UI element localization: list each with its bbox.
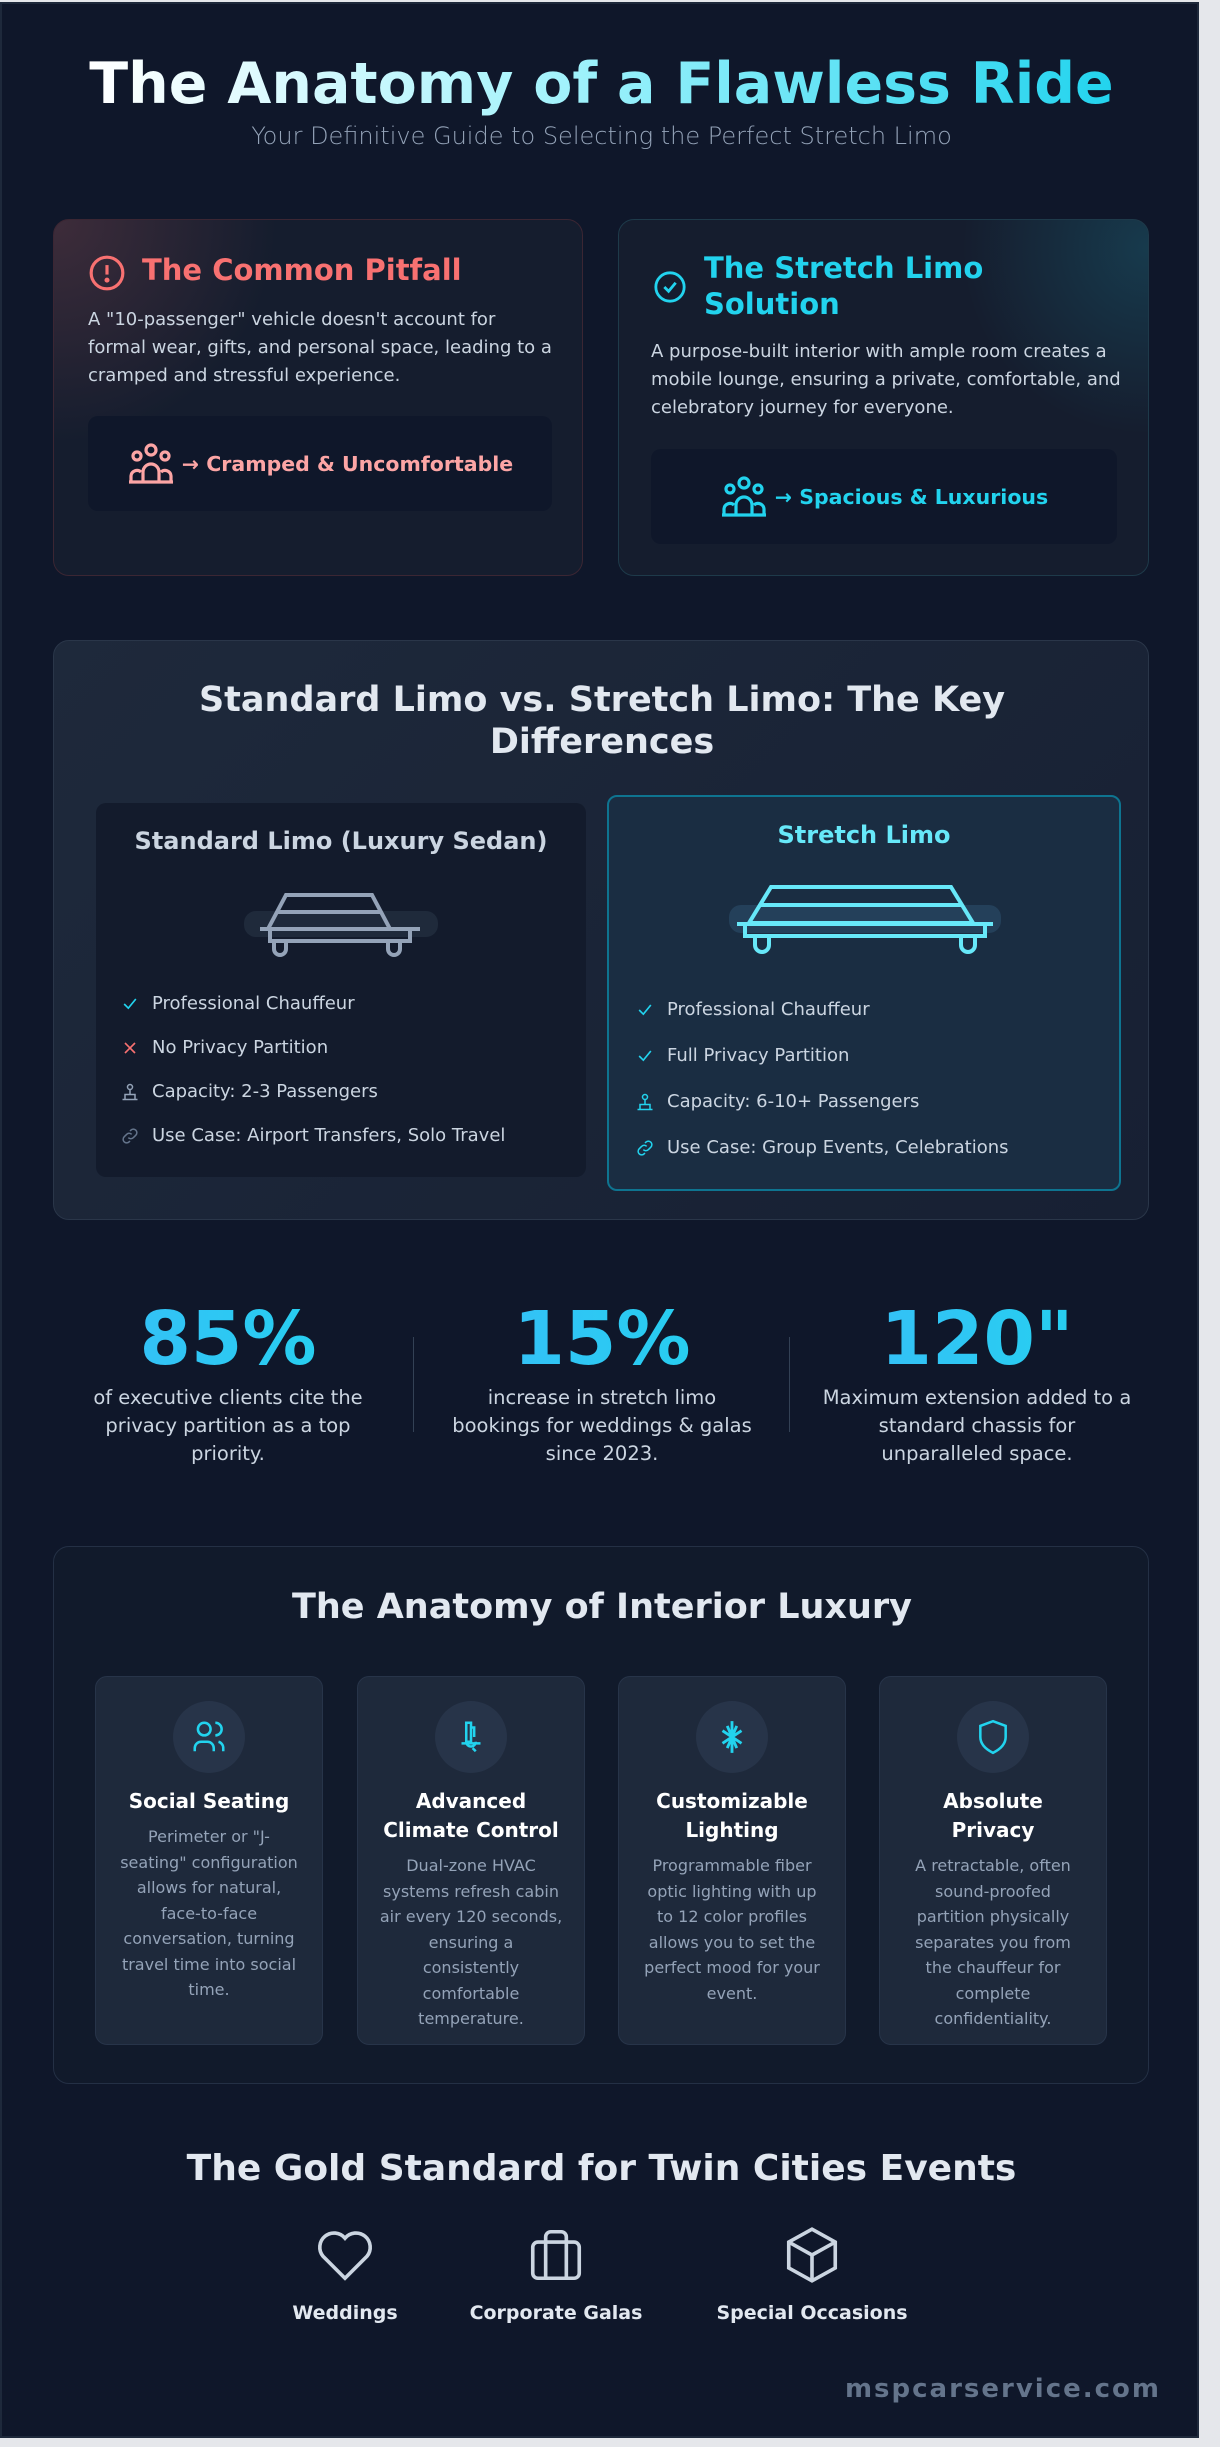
stat: 85%	[93, 1296, 363, 1465]
heading: stretch: Stretch Limo	[777, 821, 951, 849]
icon: corporate galas: Corporate Galas	[470, 2302, 642, 2324]
list: stretch features: Full Privacy Partition	[667, 1045, 849, 1066]
panel: comparison	[53, 640, 1149, 1220]
heading: pitfall: The Common Pitfall	[142, 253, 462, 287]
icon: warning	[90, 256, 124, 290]
card: social seating: Social Seating	[129, 1789, 289, 1813]
text: pitfall: A "10-passenger" vehicle doesn't account for formal wear, gifts, and personal space, leading to a cramped and stressful experience.	[88, 309, 552, 386]
card: privacy: Absolute	[943, 1789, 1043, 1813]
card: climate control: Dual-zone HVAC systems refresh cabin air every 120 seconds, ensuring a consistently comfortable temperature.	[380, 1856, 562, 2028]
icon: weddings: Weddings	[292, 2302, 398, 2324]
icon: special occasions	[716, 2227, 908, 2324]
list: standard features: Capacity: 2-3 Passengers	[152, 1081, 378, 1102]
panel: common pitfall	[53, 219, 583, 576]
list: standard features: Professional Chauffeur	[152, 993, 355, 1014]
heading: solution	[704, 251, 983, 321]
subtitle: Your Definitive Guide to Selecting the Perfect Stretch Limo	[251, 122, 952, 150]
list: standard features: No Privacy Partition	[152, 1037, 328, 1058]
list: standard features	[122, 993, 505, 1146]
list: standard features: Use Case: Airport Transfers, Solo Travel	[152, 1125, 505, 1146]
icon: weddings	[292, 2231, 398, 2324]
stat: 120	[823, 1296, 1131, 1465]
stat: 85%: 85%	[139, 1296, 317, 1382]
list: stretch features: Capacity: 6-10+ Passengers	[667, 1091, 919, 1112]
callout: cramped: → Cramped & Uncomfortable	[182, 452, 513, 476]
list: stretch features: Use Case: Group Events, Celebrations	[667, 1137, 1009, 1158]
panel: stretch limo solution	[618, 219, 1149, 576]
stat: 15%: 15%	[513, 1296, 691, 1382]
card: stretch limo	[607, 795, 1121, 1191]
card: lighting: Customizable	[656, 1789, 808, 1813]
card: climate control	[357, 1676, 585, 2045]
heading: gold standard: The Gold Standard for Twin Cities Events	[187, 2148, 1016, 2189]
callout: spacious	[651, 449, 1117, 544]
list: stretch features	[637, 999, 1009, 1158]
card: social seating: Perimeter or "J-seating" configuration allows for natural, face-to-face conversation, turning travel time into social time.	[120, 1827, 298, 1999]
heading: comparison	[199, 680, 1005, 762]
icon: sedan	[244, 893, 438, 957]
callout: cramped	[88, 416, 552, 511]
icon: check circle	[654, 271, 686, 303]
card: privacy: A retractable, often sound-proofed partition physically separates you from the chauffeur for complete confidentiality.	[915, 1856, 1071, 2028]
footer: website: mspcarservice.com	[845, 2374, 1161, 2404]
card: lighting: Lighting	[685, 1818, 779, 1842]
icon: special occasions: Special Occasions	[716, 2302, 908, 2324]
card: privacy: Privacy	[952, 1818, 1034, 1842]
text: solution: A purpose-built interior with ample room creates a mobile lounge, ensuring a private, comfortable, and celebratory journey for everyone.	[651, 341, 1121, 418]
stat: 15%	[452, 1296, 752, 1465]
card: climate control: Advanced	[416, 1789, 526, 1813]
stat: 85%: of executive clients cite the privacy partition as a top priority.	[93, 1386, 363, 1465]
stat: 15%: increase in stretch limo bookings for weddings & galas since 2023.	[452, 1386, 752, 1465]
heading: solution: The Stretch Limo	[704, 251, 983, 285]
icon: stretch limo	[729, 885, 1001, 954]
panel: interior luxury	[53, 1546, 1149, 2084]
list: stretch features: Professional Chauffeur	[667, 999, 870, 1020]
heading: comparison: Differences	[490, 722, 714, 762]
card: standard limo	[96, 803, 586, 1177]
heading: solution: Solution	[704, 287, 840, 321]
heading: standard: Standard Limo (Luxury Sedan)	[135, 827, 547, 855]
icon: corporate galas	[470, 2230, 642, 2324]
heading: interior: The Anatomy of Interior Luxury	[292, 1587, 912, 1627]
card: lighting	[618, 1676, 846, 2045]
stat: 120: 120"	[880, 1296, 1074, 1382]
card: climate control: Climate Control	[383, 1818, 559, 1842]
stat: 120: Maximum extension added to a standard chassis for unparalleled space.	[823, 1386, 1131, 1465]
callout: spacious: → Spacious & Luxurious	[775, 484, 1048, 508]
heading: comparison: Standard Limo vs. Stretch Limo: The Key	[199, 680, 1005, 720]
card: privacy	[879, 1676, 1107, 2045]
card: lighting: Programmable fiber optic lighting with up to 12 color profiles allows you to set the perfect mood for your event.	[644, 1856, 820, 2002]
title: The Anatomy of a Flawless Ride	[89, 51, 1114, 117]
card: social seating	[95, 1676, 323, 2045]
